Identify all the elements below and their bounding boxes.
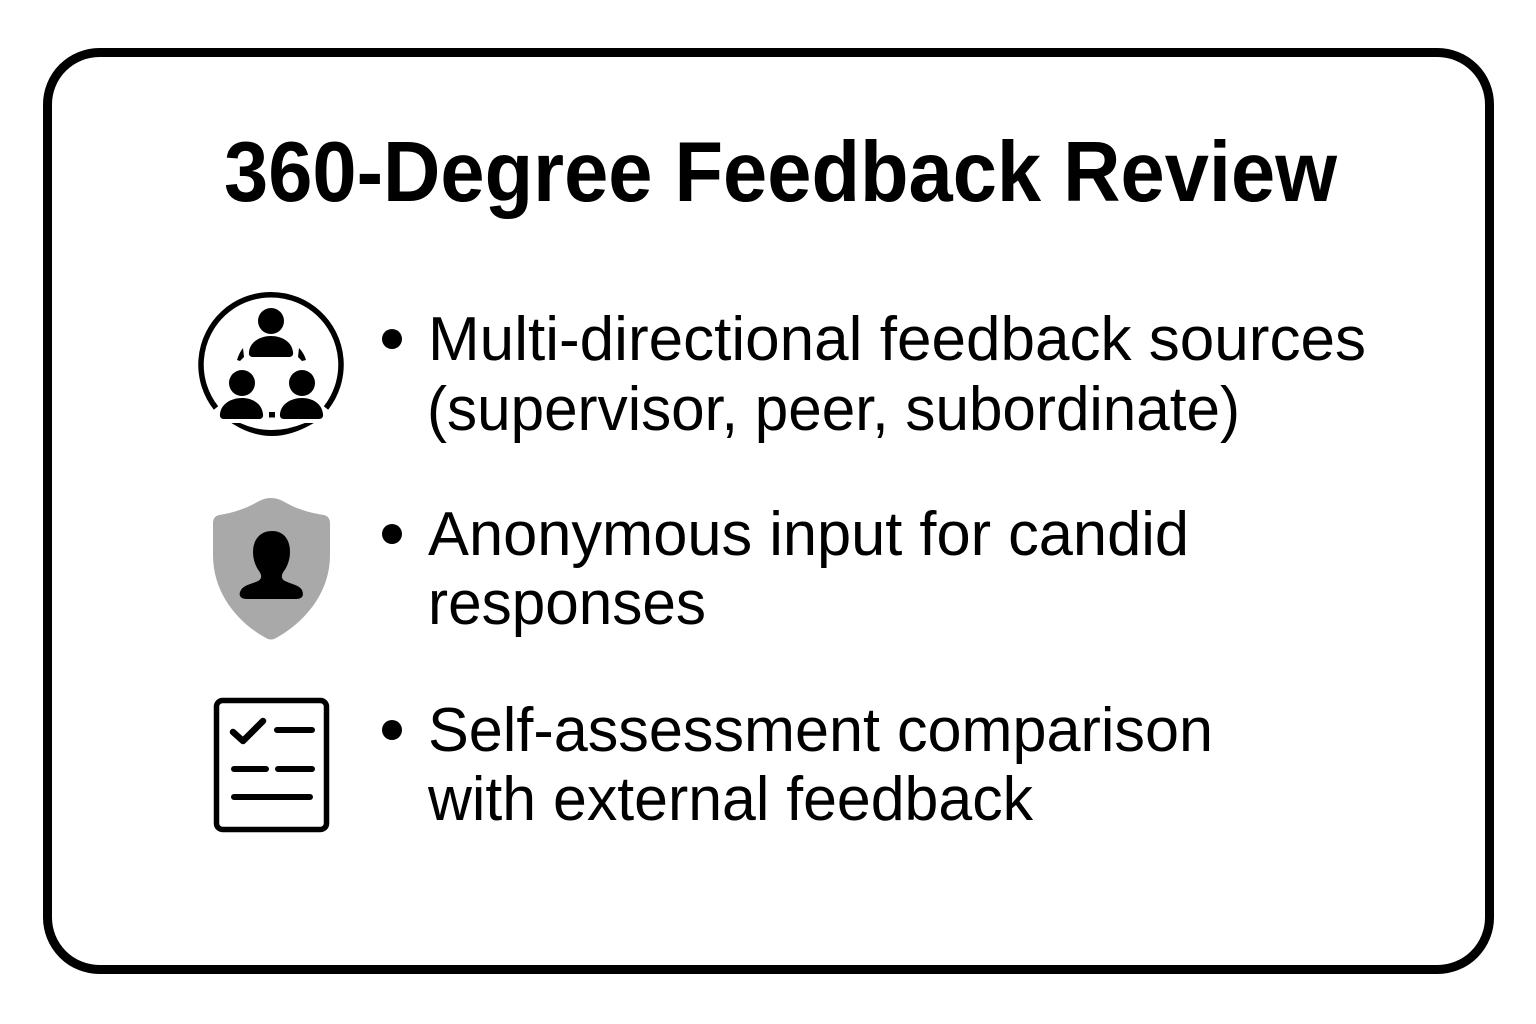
feedback item 3 [216, 696, 1213, 834]
text: multi-directional feedback sources: (supervisor, peer, subordinate) [427, 375, 1240, 444]
text: self-assessment comparison [427, 696, 1213, 834]
icon: three people in a circle [201, 295, 341, 435]
text: self-assessment comparison: with external feedback [427, 765, 1034, 834]
title: 360-Degree Feedback Review [224, 125, 1338, 220]
bullet [382, 524, 402, 544]
text: anonymous input: responses [428, 569, 706, 638]
feedback item 2 [213, 498, 1189, 640]
bullet [382, 720, 402, 740]
text: self-assessment comparison: Self-assessment comparison [428, 696, 1213, 765]
icon: shield with anonymous person [213, 498, 330, 640]
feedback item 1 [201, 295, 1366, 444]
text: anonymous input [428, 500, 1189, 638]
icon: checklist [216, 700, 326, 830]
bullet [382, 329, 402, 349]
text: multi-directional feedback sources: Multi-directional feedback sources [428, 305, 1366, 374]
text: anonymous input: Anonymous input for candid [428, 500, 1189, 569]
text: multi-directional feedback sources [427, 305, 1366, 444]
